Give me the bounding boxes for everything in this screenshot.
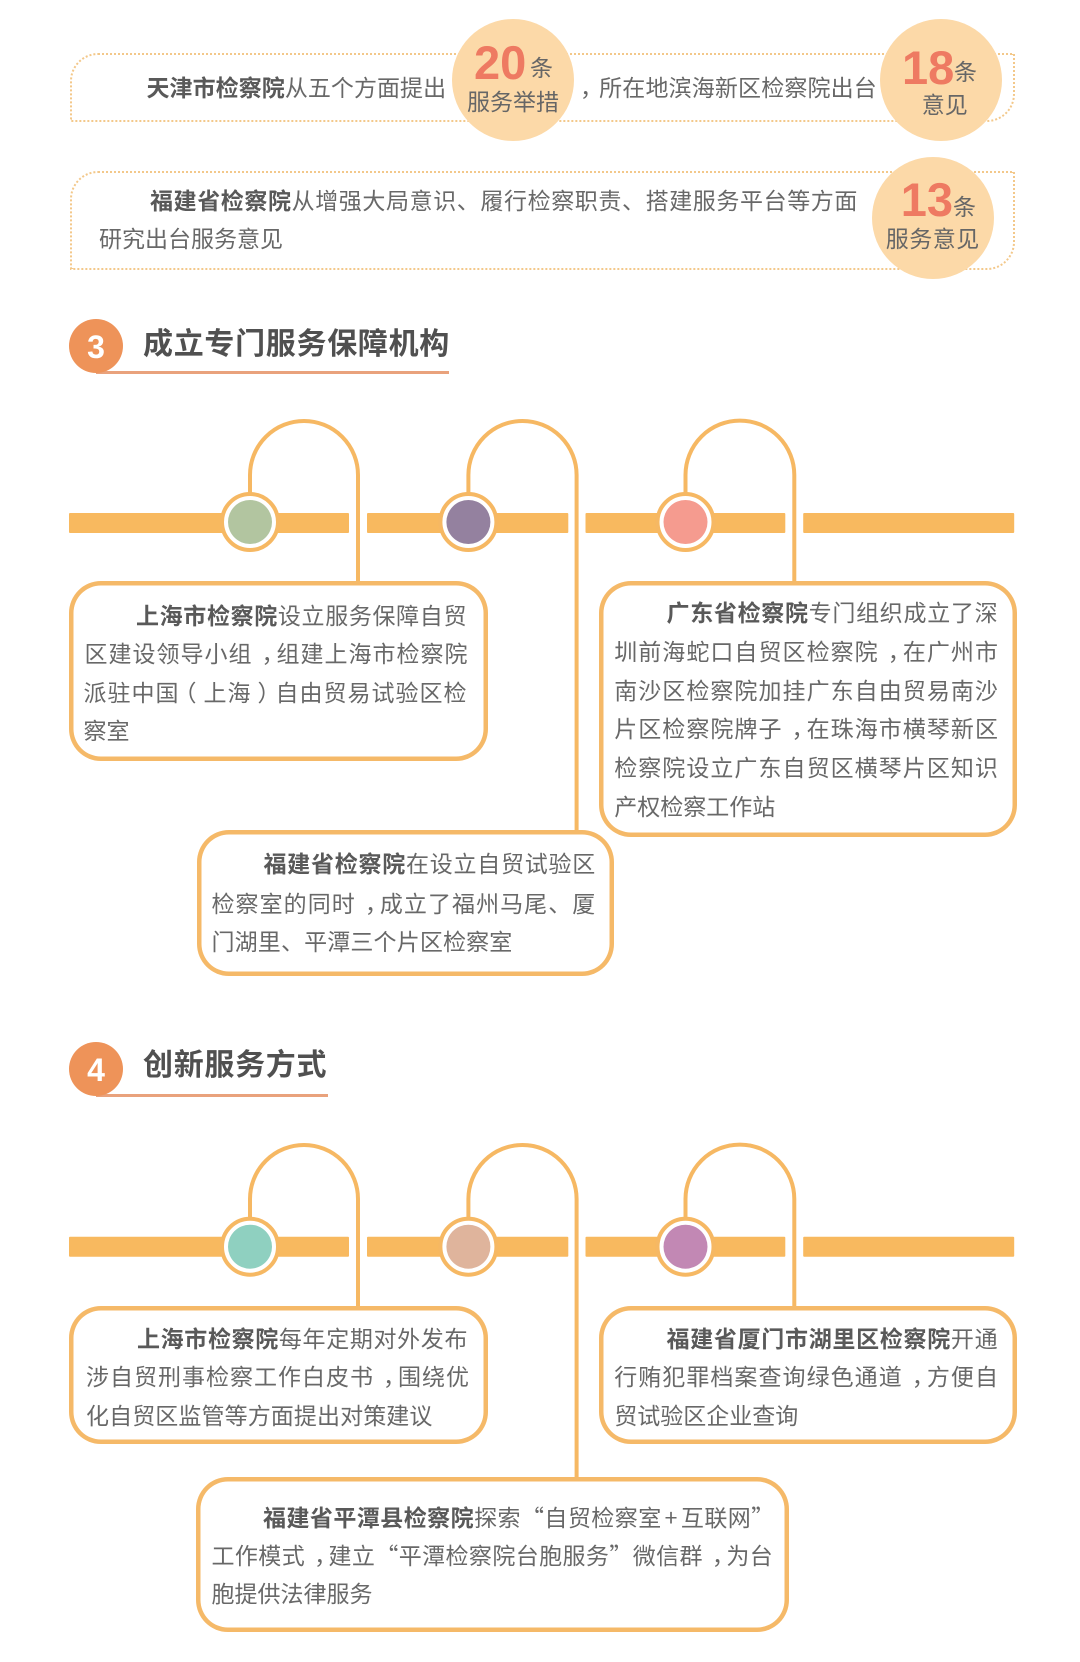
unit: 条: [953, 188, 976, 222]
card: Xiamen Huli procuratorate: [598, 1306, 1017, 1444]
text: Tianjin second half: ，所在地滨海新区检察院出台: [580, 69, 877, 103]
marker: green: [222, 494, 278, 550]
heading: section 4: [69, 1040, 328, 1097]
number badge 3: [69, 319, 123, 373]
card: Shanghai white paper: 化自贸区监管等方面提出对策建议: [86, 1397, 432, 1431]
card: Shanghai procuratorate: 上海市检察院设立服务保障自贸: [136, 597, 467, 631]
card: Shanghai procuratorate: [69, 581, 488, 761]
card: Pingtan procuratorate: 工作模式 ，建立“平潭检察院台胞服务”微信群 ，为台: [212, 1537, 773, 1571]
heading text: 创新服务方式: [143, 1040, 327, 1084]
underline: [96, 1094, 328, 1097]
rail segments: [69, 513, 1014, 533]
card: Xiamen Huli procuratorate: 行贿犯罪档案查询绿色通道 ，方便自: [614, 1358, 999, 1392]
card: Guangdong procuratorate: 圳前海蛇口自贸区检察院 ，在广州市: [614, 633, 999, 667]
card: Guangdong procuratorate: 产权检察工作站: [614, 788, 775, 822]
text: Fujian summary: 福建省检察院从增强大局意识、履行检察职责、搭建服务平台等方面: [150, 182, 858, 216]
marker: tan: [440, 1219, 496, 1275]
card: Guangdong procuratorate: [598, 581, 1017, 837]
marker: teal: [222, 1219, 278, 1275]
card: Xiamen Huli procuratorate: 贸试验区企业查询: [614, 1397, 798, 1431]
number 13: 13: [901, 173, 953, 226]
marker: salmon: [658, 494, 714, 550]
card: Fujian procuratorate: 门湖里、平潭三个片区检察室: [212, 923, 512, 957]
card: Guangdong procuratorate: 南沙区检察院加挂广东自由贸易南沙: [614, 672, 999, 706]
card: Fujian procuratorate: [196, 830, 614, 976]
number badge 4: 4: [87, 1052, 105, 1088]
heading: section 3: [69, 318, 450, 374]
card: Shanghai procuratorate: 察室: [84, 712, 130, 746]
panel: Tianjin summary: [70, 19, 1015, 141]
caption: 服务意见: [886, 220, 980, 254]
connector loops: [250, 1145, 794, 1483]
card: Guangdong procuratorate: 检察院设立广东自贸区横琴片区知识: [614, 749, 999, 783]
dotted frame: [70, 53, 1015, 122]
text: Fujian summary line two: 研究出台服务意见: [99, 220, 283, 254]
number 20: 20: [474, 36, 526, 89]
card: Pingtan procuratorate: 胞提供法律服务: [212, 1575, 372, 1609]
card: Xiamen Huli procuratorate: 福建省厦门市湖里区检察院开通: [666, 1320, 998, 1354]
number 18: 18: [902, 41, 954, 94]
connector loops: [250, 421, 794, 836]
underline: [96, 371, 449, 374]
card: Shanghai procuratorate: 区建设领导小组 ，组建上海市检察院: [84, 635, 468, 669]
heading text: 成立专门服务保障机构: [143, 318, 450, 362]
card: Shanghai white paper: [69, 1306, 488, 1444]
badge: 13 opinions: [872, 157, 994, 279]
card: Shanghai white paper: 涉自贸刑事检察工作白皮书 ，围绕优: [86, 1358, 470, 1392]
badge: 20 measures: [452, 19, 574, 141]
card: Pingtan procuratorate: [196, 1477, 789, 1632]
marker: plum: [658, 1219, 714, 1275]
marker: purple: [440, 494, 496, 550]
badge: 18 opinions: [880, 19, 1002, 141]
card: Guangdong procuratorate: 片区检察院牌子 ，在珠海市横琴新区: [614, 710, 999, 744]
card: Fujian procuratorate: 福建省检察院在设立自贸试验区: [264, 845, 596, 879]
dotted frame: [70, 171, 1015, 270]
timeline: section 3 rails, loops and markers: [69, 418, 1014, 830]
unit: 条: [954, 53, 977, 87]
unit: 条: [530, 49, 553, 83]
caption: 服务举措: [467, 83, 559, 117]
caption: 意见: [922, 86, 968, 120]
card: Guangdong procuratorate: 广东省检察院专门组织成立了深: [666, 594, 998, 628]
text: Tianjin first half: 天津市检察院从五个方面提出: [146, 69, 446, 103]
card: Shanghai white paper: 上海市检察院每年定期对外发布: [137, 1320, 468, 1354]
number badge 4: [69, 1042, 123, 1096]
rail segments: [69, 1237, 1014, 1257]
card: Pingtan procuratorate: 福建省平潭县检察院探索“自贸检察室+互联网”: [263, 1499, 775, 1533]
card: Fujian procuratorate: 检察室的同时 ，成立了福州马尾、厦: [212, 885, 596, 919]
card: Shanghai procuratorate: 派驻中国（ 上海 ）自由贸易试验区检: [84, 674, 468, 708]
number badge 3: 3: [87, 329, 105, 365]
panel: Fujian summary: [70, 157, 1015, 279]
